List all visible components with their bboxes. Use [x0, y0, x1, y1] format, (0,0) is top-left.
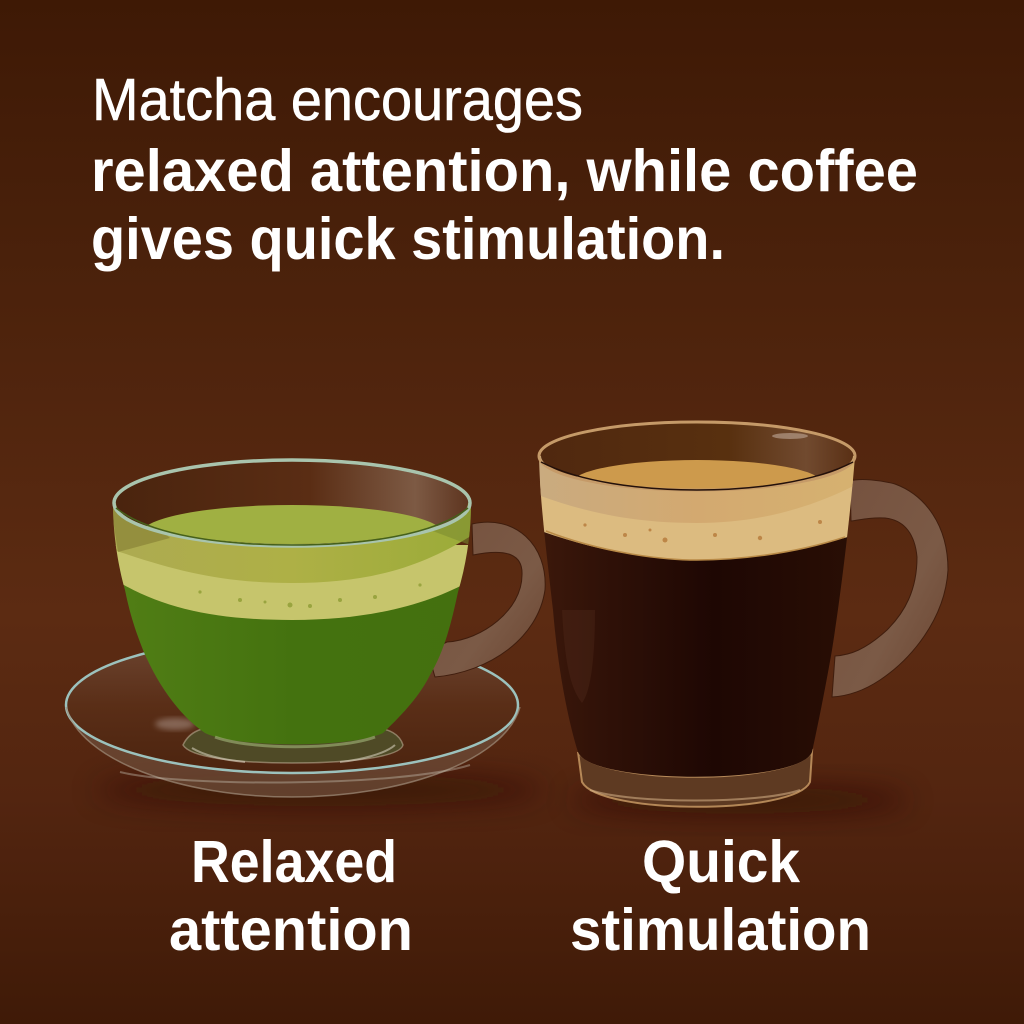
matcha cup with saucer [66, 450, 545, 806]
mug interior [541, 423, 853, 489]
title: gives quick stimulation. [91, 206, 725, 272]
matcha surface [146, 505, 437, 544]
mug rim [539, 422, 855, 560]
coffee crema surface [577, 460, 817, 488]
foot highlight [215, 737, 375, 747]
shadow under saucer [95, 774, 545, 806]
mug body with crema and coffee [539, 456, 854, 777]
label: quick stimulation: Quick [642, 829, 800, 895]
label: relaxed attention [169, 829, 413, 963]
cup rim [114, 460, 470, 546]
foam speckles [198, 583, 422, 608]
label: relaxed attention: Relaxed [191, 829, 397, 895]
cup foot [183, 728, 403, 763]
shadow under mug [570, 786, 910, 814]
label: quick stimulation: stimulation [570, 897, 871, 963]
coffee mug [530, 422, 948, 814]
label: quick stimulation [570, 829, 871, 963]
cup interior [116, 462, 468, 544]
icon: glass saucer [66, 637, 520, 797]
icon: cup handle [430, 522, 545, 677]
mug glass base [578, 752, 812, 807]
icon: mug handle [832, 480, 948, 697]
crema speckles [583, 520, 822, 542]
title [91, 67, 918, 272]
label: relaxed attention: attention [169, 897, 413, 963]
title: relaxed attention, while coffee [91, 138, 918, 204]
title: Matcha encourages [92, 67, 583, 133]
cup body with foam and matcha [113, 503, 471, 744]
